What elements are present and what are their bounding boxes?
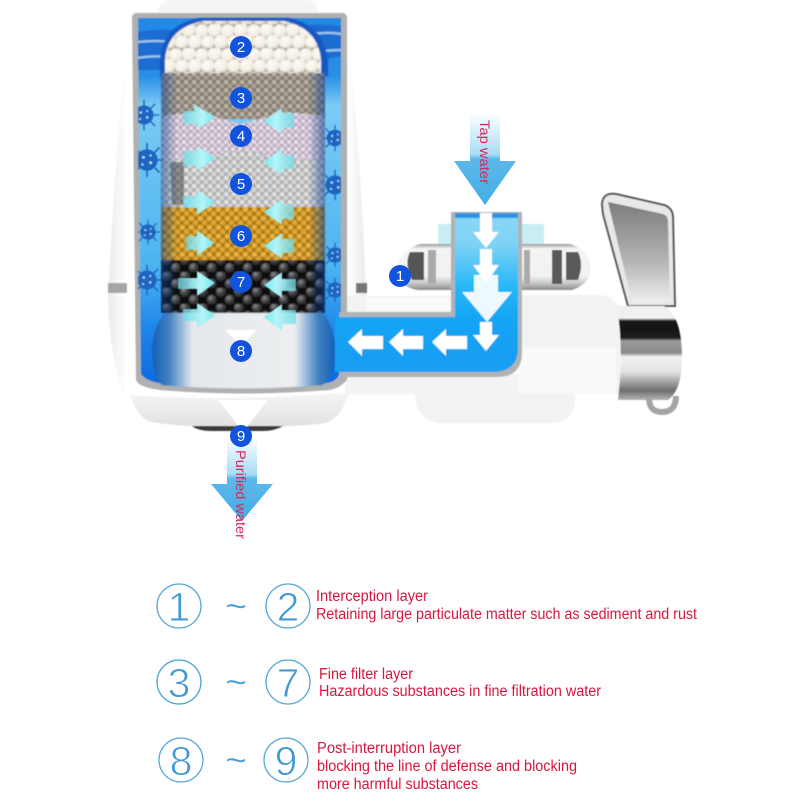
outlet funnel [218, 400, 268, 432]
number badges: 4 [237, 128, 245, 145]
cartridge back [160, 18, 328, 76]
legend row: post-interruption layer [159, 738, 577, 793]
water channel [335, 212, 522, 377]
legend row: interception layer: Retaining large particulate matter such as sediment and rust [316, 606, 698, 623]
flow arrows in cartridge [178, 104, 296, 331]
legend row: post-interruption layer: blocking the line of defense and blocking [317, 758, 577, 775]
water tank [129, 13, 350, 394]
filter cartridge layers [152, 18, 335, 388]
layer 2 white balls [165, 21, 321, 73]
number badges: 2 [237, 39, 245, 56]
blue water [138, 18, 341, 383]
legend row: fine filter layer: 3 [168, 660, 190, 706]
purified water arrow: Purified water [233, 450, 249, 539]
number badges: 3 [237, 90, 245, 107]
layer 8 foam [152, 313, 335, 388]
tap water arrow [454, 113, 516, 205]
number badges: 7 [237, 274, 245, 291]
legend row: fine filter layer: Hazardous substances in fine filtration water [319, 683, 601, 700]
legend row: post-interruption layer: 9 [275, 738, 297, 784]
layer 5 light grey [162, 150, 325, 210]
cyan collar [438, 224, 544, 244]
top cap [158, 0, 318, 12]
lower knob [415, 393, 575, 423]
legend row: interception layer: 2 [277, 584, 299, 630]
tap body [345, 194, 682, 423]
bottom cap [130, 392, 349, 427]
legend row: post-interruption layer: more harmful substances [317, 776, 478, 793]
legend row: fine filter layer: Fine filter layer [319, 666, 413, 683]
legend row: post-interruption layer: Post-interruption layer [317, 740, 461, 757]
chrome hook [649, 396, 676, 412]
legend row: interception layer: 1 [168, 584, 190, 630]
channel water [335, 213, 518, 372]
filter housing [108, 0, 367, 431]
legend row: fine filter layer: 7 [277, 660, 299, 706]
number badges: 9 [237, 428, 245, 445]
cartridge edge shadow [161, 73, 325, 313]
legend row: interception layer: ~ [225, 586, 247, 628]
tap water arrow: Tap water [477, 120, 493, 184]
legend row: post-interruption layer: 8 [170, 738, 192, 784]
white flow arrows [473, 213, 499, 248]
white body [345, 295, 620, 394]
number badges: 5 [237, 176, 245, 193]
number badges: 1 [396, 268, 404, 285]
grey frame [132, 13, 347, 394]
legend row: fine filter layer: ~ [225, 662, 247, 704]
legend row: interception layer [157, 584, 698, 630]
side clips [108, 283, 127, 293]
layer 6 gold [161, 207, 325, 261]
chrome valve [617, 306, 682, 400]
layer 4 lilac [162, 112, 325, 170]
white shell [108, 14, 366, 398]
purified water arrow [211, 436, 273, 539]
legend row: interception layer: Interception layer [316, 588, 428, 605]
channel frame [339, 212, 522, 377]
legend row: post-interruption layer: ~ [225, 740, 247, 782]
number badges: 8 [237, 343, 245, 360]
layer 3 grey-brown [162, 73, 325, 119]
number badges [230, 36, 411, 447]
viruses [129, 100, 350, 302]
chrome clamp [396, 244, 591, 290]
legend row: fine filter layer [157, 660, 601, 706]
chrome lever [602, 194, 675, 306]
number badges: 6 [237, 228, 245, 245]
layer 7 black [161, 260, 325, 313]
